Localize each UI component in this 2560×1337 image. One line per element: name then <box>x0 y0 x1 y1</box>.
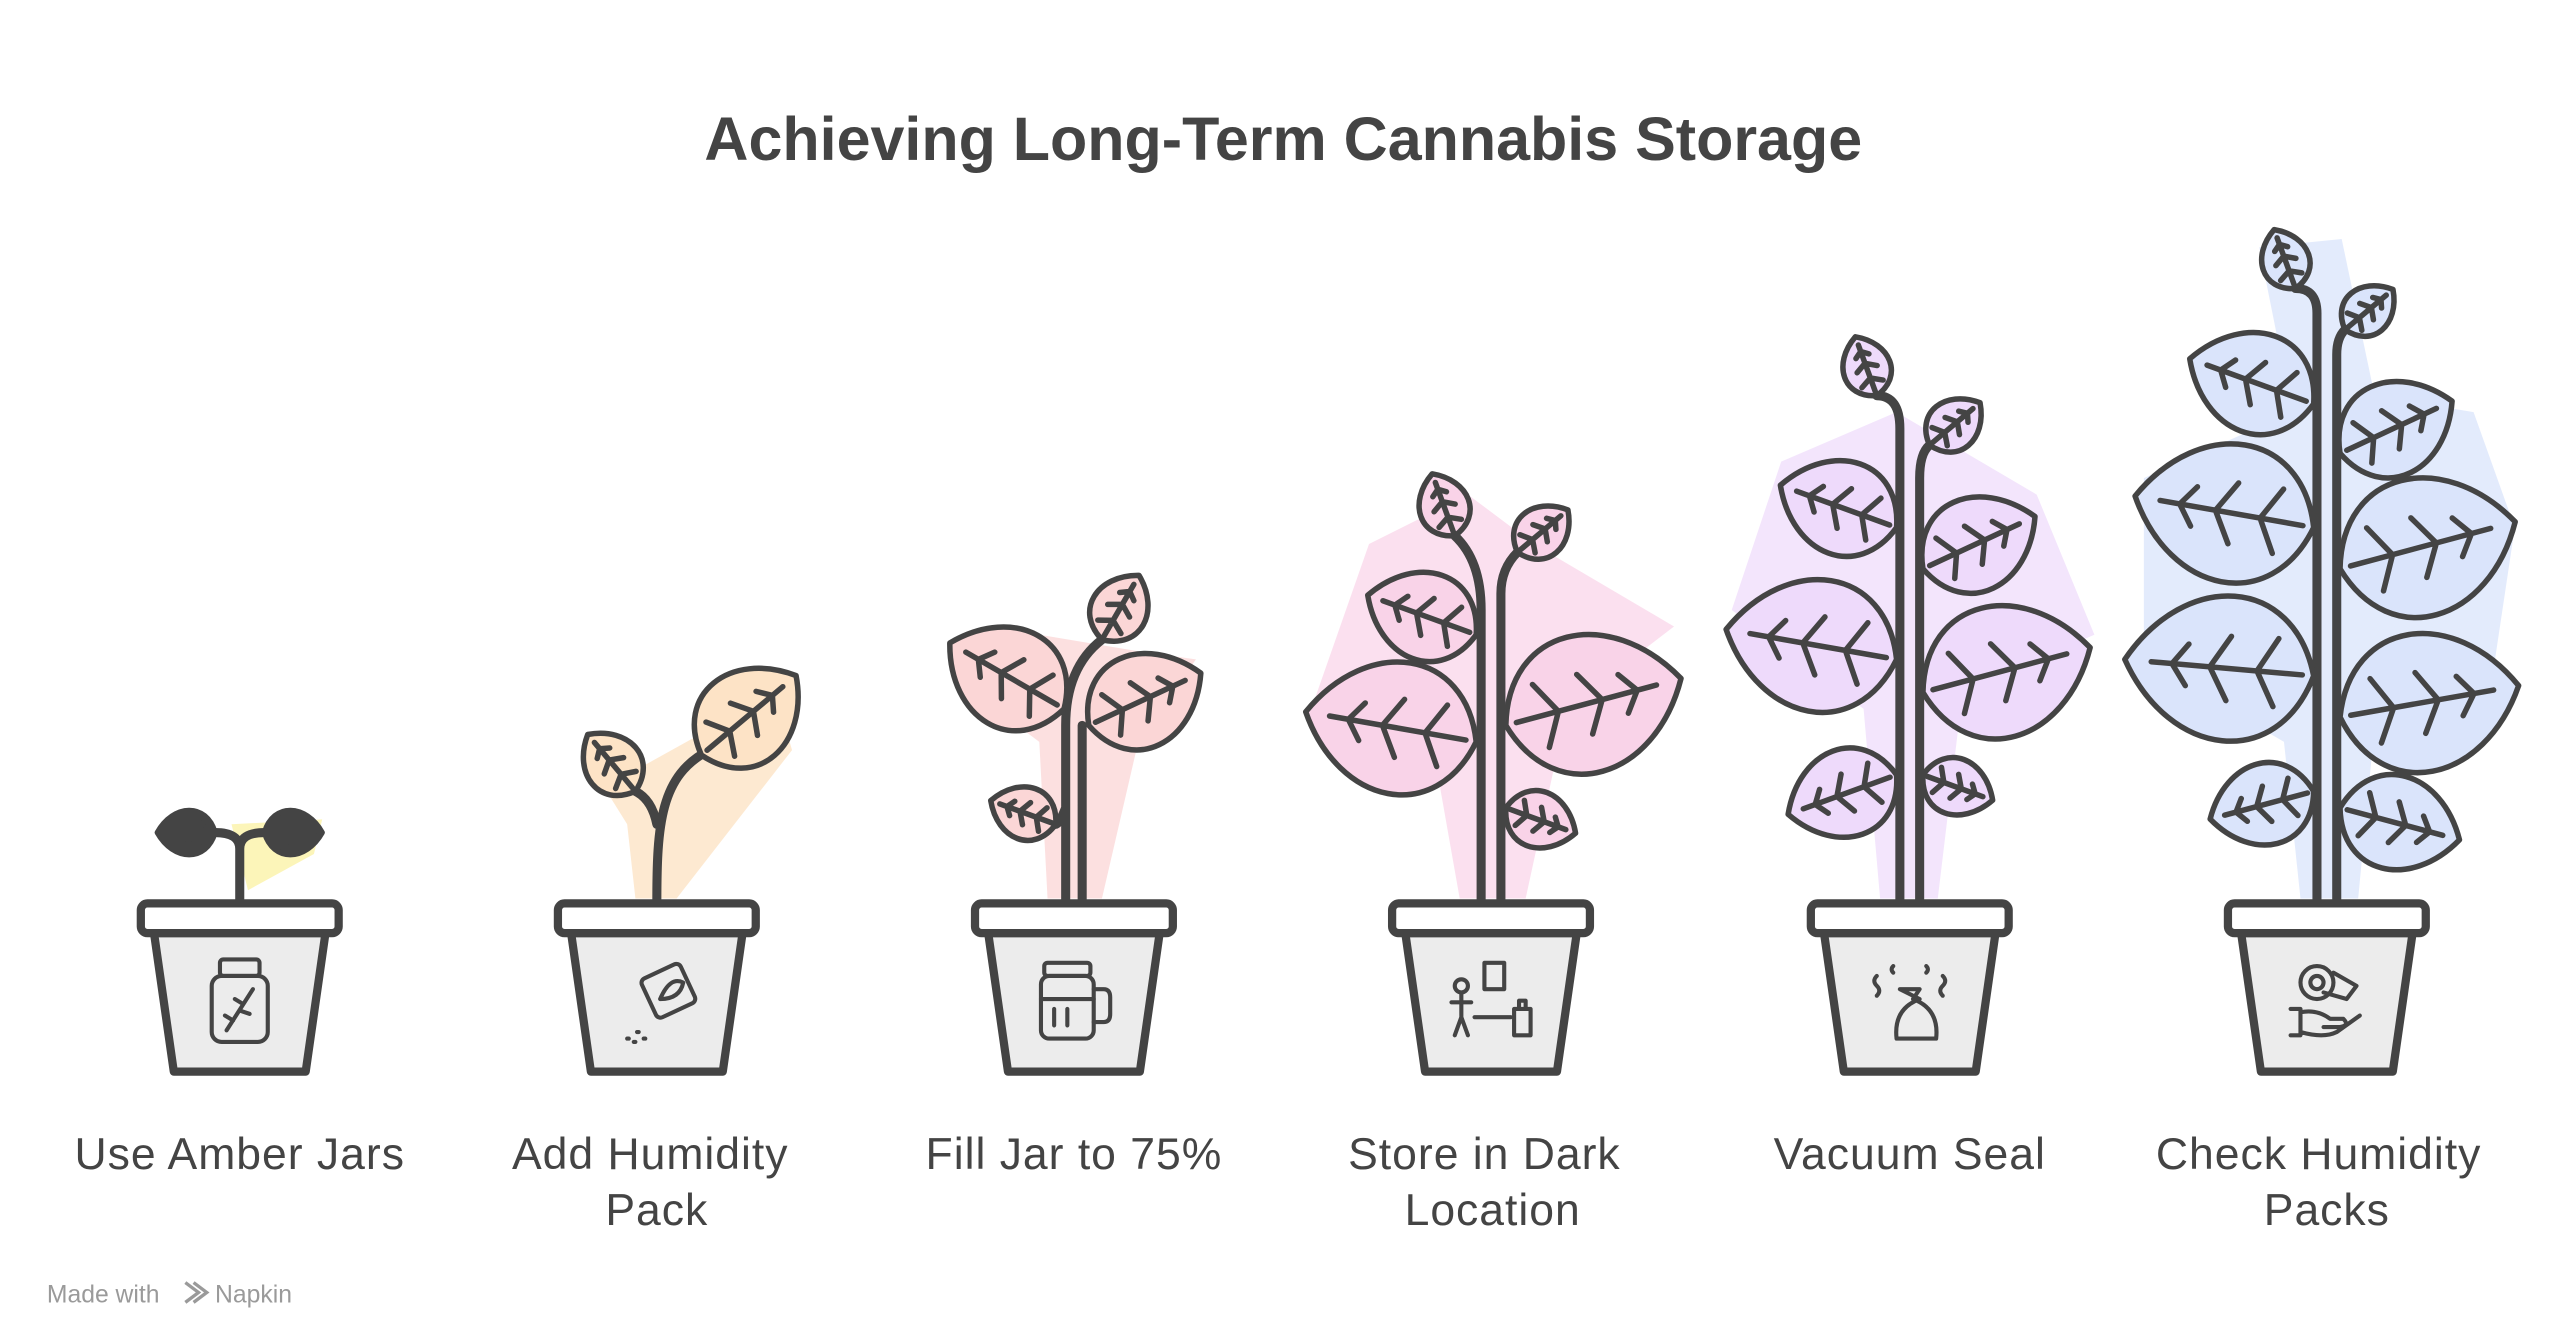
pot 3 <box>975 903 1173 1072</box>
icon: dark room <box>1451 963 1531 1035</box>
label 4: Location <box>1405 1186 1581 1235</box>
label 6: Packs <box>2264 1186 2390 1235</box>
label 5: Vacuum Seal <box>1774 1130 2046 1179</box>
footer: made with napkin: Napkin <box>215 1281 292 1308</box>
icon: amber jar <box>212 959 268 1042</box>
icon: vacuum bag <box>1874 966 1945 1039</box>
footer: made with napkin <box>47 1281 292 1308</box>
label 6: Check Humidity <box>2156 1130 2481 1179</box>
label 3: Fill Jar to 75% <box>926 1130 1222 1179</box>
pots <box>141 903 2426 1072</box>
plant 2: Add Humidity Pack <box>566 639 826 903</box>
label 4: Store in Dark <box>1348 1130 1621 1179</box>
footer: made with napkin: Made with <box>47 1281 160 1308</box>
icon: hand with pack <box>2291 966 2360 1035</box>
label 2: Add Humidity <box>512 1130 788 1179</box>
pot 6 <box>2228 903 2426 1072</box>
icon: humidity pack <box>627 962 697 1042</box>
pot 4 <box>1392 903 1590 1072</box>
label 1: Use Amber Jars <box>75 1130 405 1179</box>
pot 5 <box>1811 903 2009 1072</box>
plant 4: Store in Dark Location <box>1294 465 1699 903</box>
pot 2 <box>558 903 756 1072</box>
plant 1: Use Amber Jars <box>157 810 322 903</box>
labels <box>75 1130 2481 1235</box>
plant 3: Fill Jar to 75% <box>925 561 1221 903</box>
plant 6: Check Humidity Packs <box>2118 221 2533 903</box>
plant 5: Vacuum Seal <box>1715 329 2107 903</box>
icon: filled jar <box>1041 963 1110 1039</box>
title: Achieving Long-Term Cannabis Storage <box>704 105 1862 173</box>
pot 1 <box>141 903 339 1072</box>
label 2: Pack <box>605 1186 708 1235</box>
